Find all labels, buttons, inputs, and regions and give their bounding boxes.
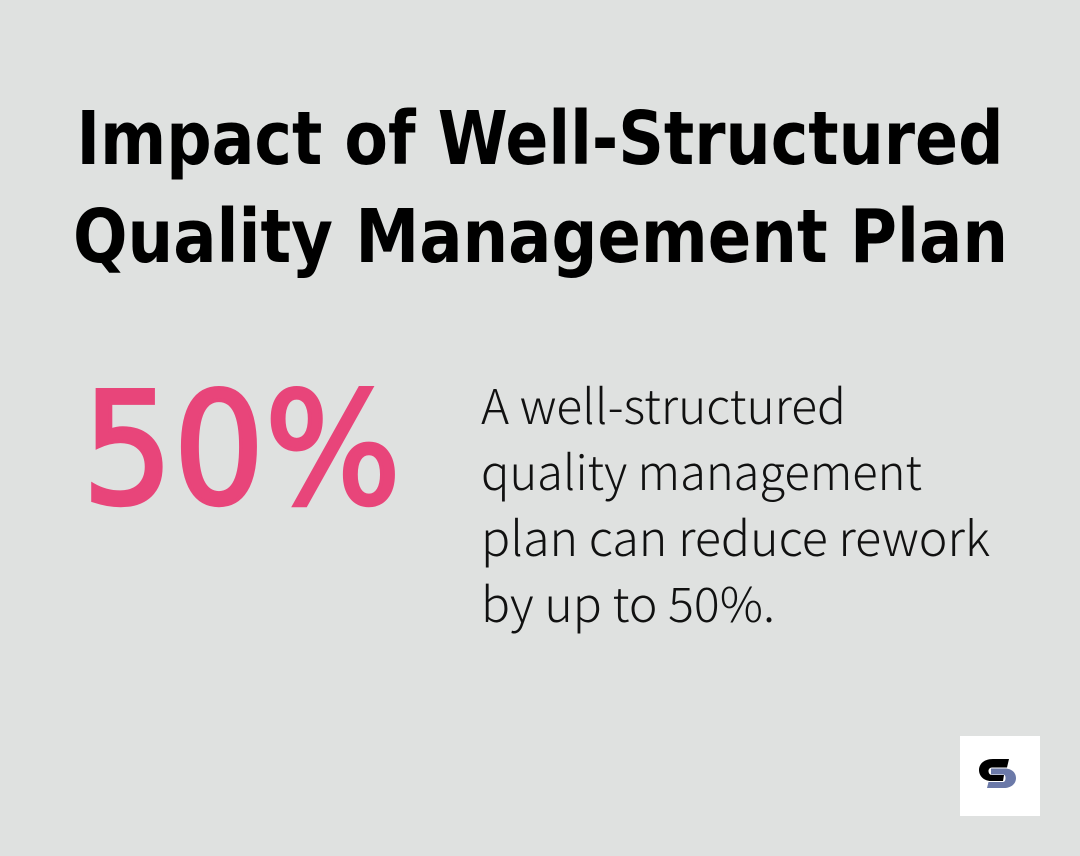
logo (960, 736, 1040, 816)
title (73, 96, 1008, 280)
description text (481, 368, 990, 636)
big stat: 50%: 50% (82, 359, 401, 540)
description text: quality management (481, 434, 922, 504)
description text: A well-structured (481, 368, 846, 438)
description text: plan can reduce rework (481, 500, 990, 570)
description text: by up to 50%. (481, 566, 775, 636)
